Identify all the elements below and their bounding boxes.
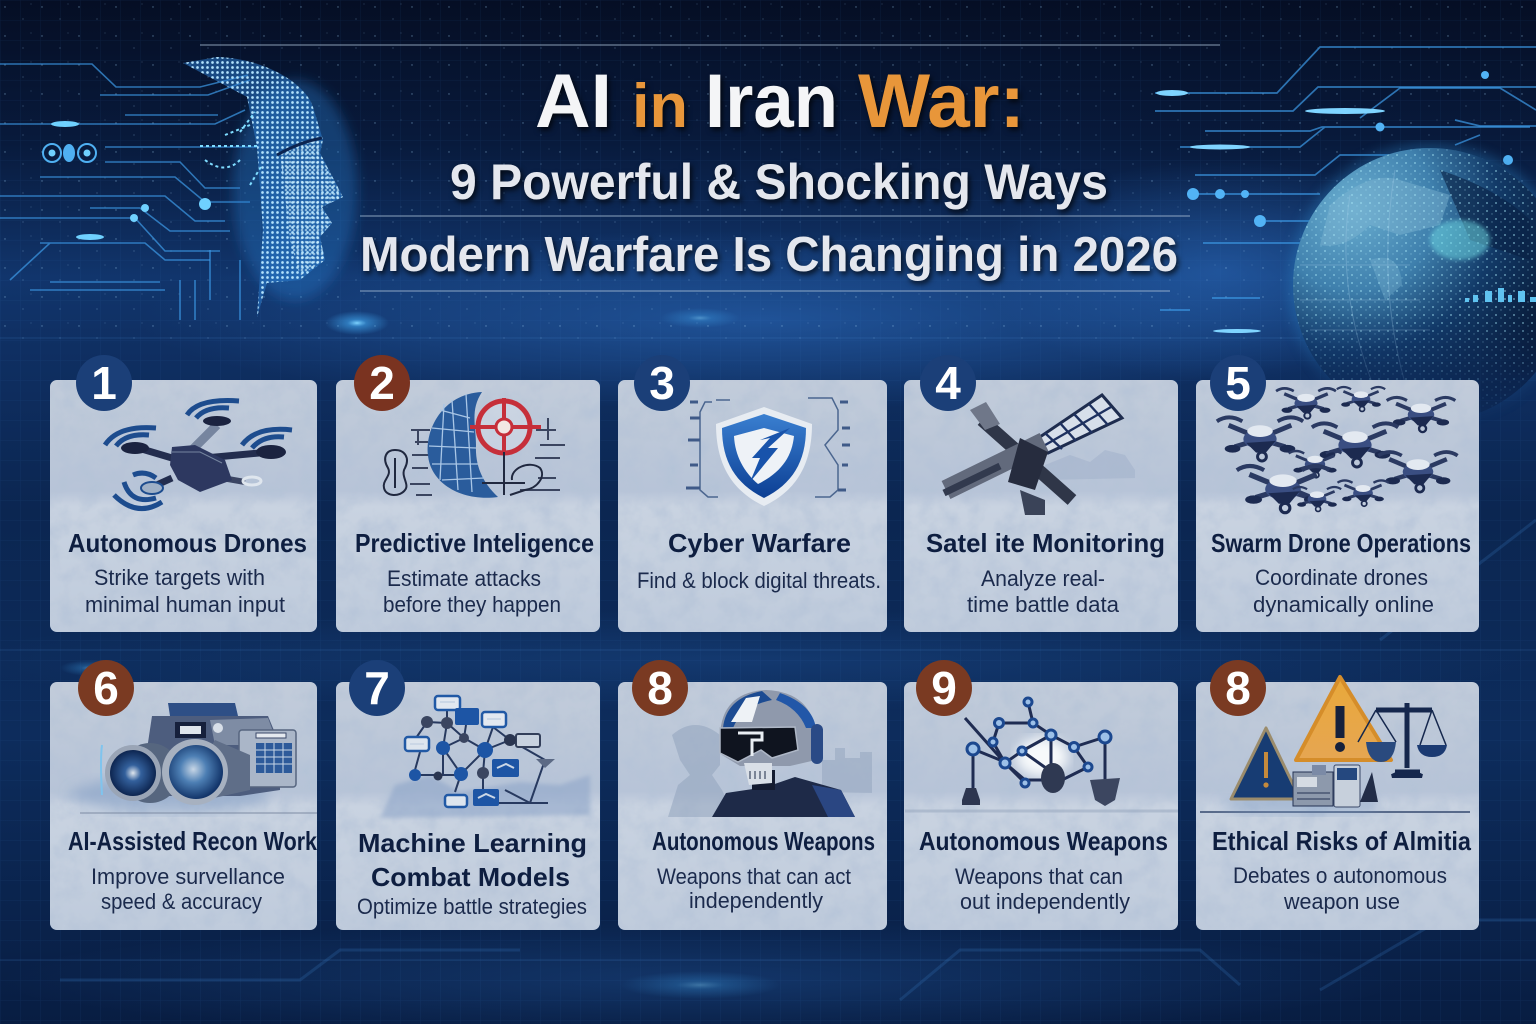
number badge 3 [634, 355, 690, 411]
number badge 1 [76, 355, 132, 411]
description: dynamically online [1253, 592, 1434, 617]
description [1253, 565, 1434, 617]
number badge 9 [916, 660, 972, 716]
heading: Combat Models [371, 862, 570, 892]
heading: Satel ite Monitoring [926, 528, 1165, 558]
description: before they happen [383, 592, 561, 617]
panel: card 7 [336, 682, 600, 930]
panel: card 2 [336, 380, 600, 632]
icon: drone [105, 401, 292, 509]
title line 1: AI [535, 59, 612, 144]
panel: card 4 [904, 380, 1178, 632]
number badge 5 [1210, 355, 1266, 411]
description: minimal human input [85, 592, 285, 617]
description [85, 565, 285, 617]
heading: Autonomous Weapons [919, 826, 1168, 856]
description [967, 566, 1120, 617]
number badge 4 [920, 355, 976, 411]
number badge 8 repeat [1210, 660, 1266, 716]
description: Analyze real- [981, 566, 1105, 591]
number badge 3: 3 [649, 357, 675, 409]
heading: Cyber Warfare [668, 528, 851, 558]
panel: card 3 [618, 380, 887, 632]
description: Find & block digital threats. [637, 568, 881, 593]
title line 1: in [632, 72, 688, 141]
title line 1: Iran [705, 59, 838, 144]
circuit lines left [0, 64, 260, 320]
description: speed & accuracy [101, 889, 262, 914]
number badge 5: 5 [1225, 357, 1251, 409]
description: Estimate attacks [387, 566, 541, 591]
description [1233, 863, 1447, 914]
icon: drone swarm [1217, 387, 1458, 513]
heading: Predictive Inteligence [355, 528, 594, 558]
description [955, 864, 1130, 914]
icon: satellite [944, 395, 1135, 515]
icon: neural network [380, 696, 590, 818]
number badge 1: 1 [91, 357, 117, 409]
description: weapon use [1283, 889, 1400, 914]
panel: card 6 [50, 682, 317, 930]
description: time battle data [967, 592, 1120, 617]
number badge 7 [349, 660, 405, 716]
description: Debates o autonomous [1233, 863, 1447, 888]
description: Weapons that can [955, 864, 1123, 889]
title line 1 [535, 59, 1025, 144]
number badge 2: 2 [369, 357, 395, 409]
icon: recon camera [70, 703, 317, 813]
heading: Machine Learning [358, 828, 587, 858]
title line 3: Modern Warfare Is Changing in 2026 [360, 228, 1178, 282]
description [383, 566, 561, 617]
title line 1: War: [858, 59, 1025, 144]
description: Optimize battle strategies [357, 894, 587, 919]
icon: pilot with visor [668, 690, 872, 817]
description: Weapons that can act [657, 864, 851, 889]
description: Strike targets with [94, 565, 265, 590]
description: Coordinate drones [1255, 565, 1428, 590]
number badge 6 [78, 660, 134, 716]
description [657, 864, 851, 913]
panel: card 10 [1196, 677, 1479, 930]
icon: globe [1288, 143, 1536, 427]
number badge 2 [354, 355, 410, 411]
panel: card 1 [50, 380, 317, 632]
title [360, 59, 1178, 282]
number badge 8 repeat: 8 [1225, 662, 1251, 714]
heading [358, 828, 587, 892]
title line 2: 9 Powerful & Shocking Ways [450, 154, 1108, 210]
icon: cyber shield [686, 398, 850, 506]
number badge 7: 7 [364, 662, 390, 714]
description: independently [689, 888, 823, 913]
description: Improve survellance [91, 864, 285, 889]
description [91, 864, 285, 914]
icon: warning triangles and scales [1200, 677, 1470, 815]
heading: Ethical Risks of Almitia [1212, 826, 1471, 856]
panel: card 9 [904, 682, 1178, 930]
number badge 6: 6 [93, 662, 119, 714]
panel: card 8 [618, 682, 887, 930]
heading: Swarm Drone Operations [1211, 528, 1471, 558]
description: out independently [960, 889, 1130, 914]
icon: predictive brain and target [384, 392, 565, 498]
icon: triple ring node [43, 144, 96, 162]
chart: small skyline bars [1465, 288, 1536, 302]
number badge 4: 4 [935, 357, 961, 409]
panel: card 5 [1196, 380, 1479, 632]
circuit lines right [1155, 47, 1536, 333]
number badge 9: 9 [931, 662, 957, 714]
number badge 8: 8 [647, 662, 673, 714]
heading: AI-Assisted Recon Work [68, 826, 317, 856]
heading: Autonomous Drones [68, 528, 307, 558]
heading: Autonomous Weapons [652, 826, 875, 856]
number badge 8 [632, 660, 688, 716]
icon: AI head [183, 57, 357, 317]
icon: weighted network [905, 698, 1178, 811]
